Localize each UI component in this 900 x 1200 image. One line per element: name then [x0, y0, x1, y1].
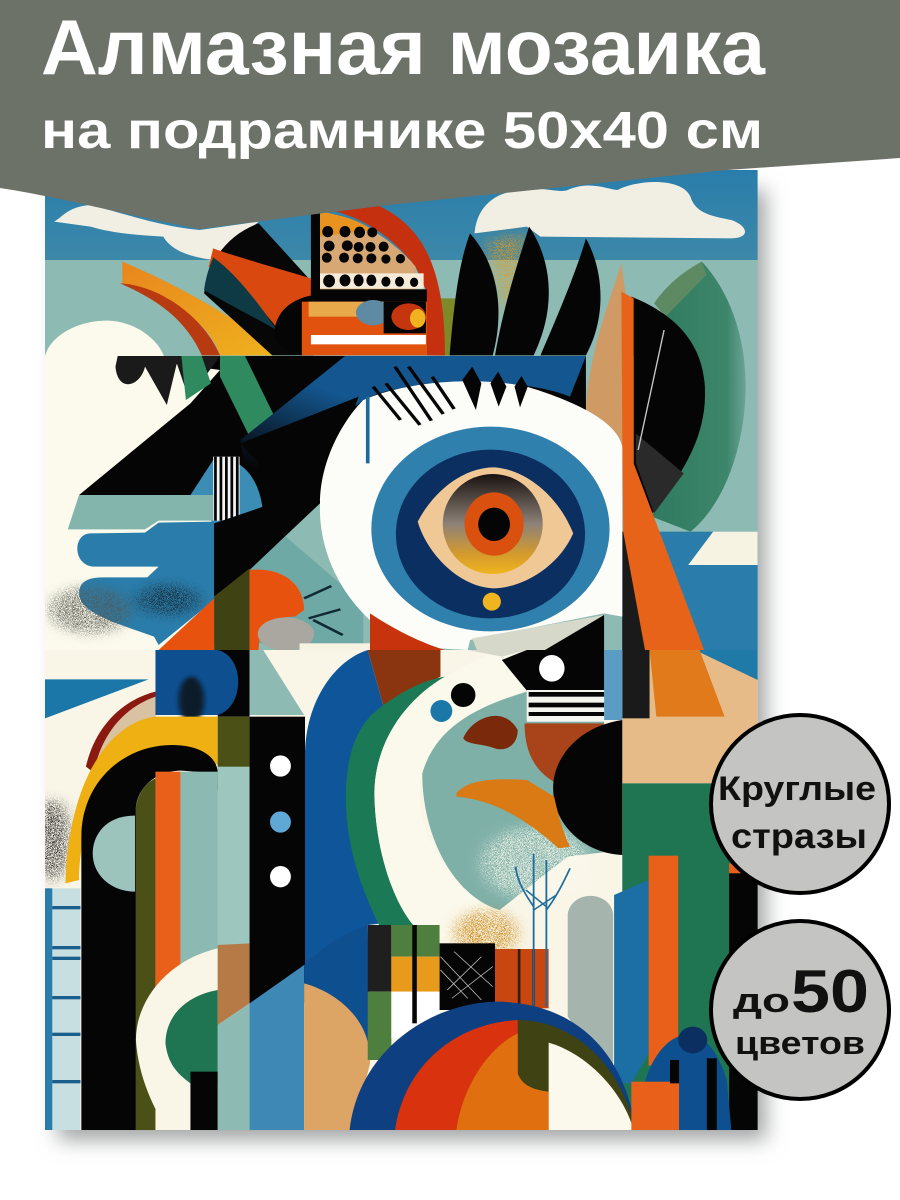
- big teal circle: [422, 692, 622, 910]
- orange beak: [456, 779, 570, 848]
- black arch: [81, 745, 218, 1130]
- orange wing: [120, 262, 284, 355]
- yellow arch: [65, 717, 218, 883]
- left ladder strip: [45, 888, 80, 1130]
- rust curve: [86, 692, 155, 770]
- navy speckle panel: [304, 925, 370, 1063]
- olive patch: [436, 298, 456, 355]
- title: Алмазная мозаика: [41, 3, 766, 91]
- badge: round rhinestones: [711, 715, 889, 893]
- rust block: [525, 723, 604, 783]
- white speckle over teal: [481, 827, 590, 900]
- orange block: [495, 949, 549, 1008]
- white crescent: [374, 650, 527, 943]
- cloud left: [54, 205, 259, 260]
- lower right blue field: [622, 532, 758, 650]
- amber speckle behind spikes: [486, 233, 527, 317]
- big bottom dome: [350, 1002, 636, 1130]
- teal nose bar: [68, 495, 213, 529]
- orange column: [649, 856, 678, 1066]
- rust blob: [463, 716, 518, 749]
- gray crescent and black: [472, 615, 604, 650]
- blue column: [614, 880, 649, 1083]
- stripes block: [368, 925, 440, 1060]
- artwork: abstract cubist painting, upper part: [45, 170, 758, 651]
- columns: [136, 717, 250, 1130]
- cloud right: [475, 182, 745, 238]
- bottom orange box: [631, 1082, 679, 1130]
- eye white: [320, 381, 622, 650]
- eye: rust below: [370, 613, 445, 650]
- radio / dotted machine: [275, 206, 445, 355]
- antenna: [515, 854, 570, 1007]
- black half circle: [553, 720, 622, 855]
- black column with dots: [250, 717, 305, 1003]
- teal half circle: [93, 816, 135, 892]
- green arc: [346, 677, 445, 925]
- black strip: [622, 532, 645, 650]
- black block with white ellipse: [468, 650, 604, 722]
- black spikes: [450, 227, 601, 355]
- orange spear: [621, 292, 704, 650]
- badge: round rhinestones: стразы: [731, 817, 867, 856]
- blue fingers: [50, 522, 214, 645]
- navy top square: [155, 650, 304, 723]
- badge: up to 50 colours: цветов: [735, 1025, 865, 1061]
- right blocks: [604, 650, 758, 1130]
- eyelashes: [368, 367, 454, 463]
- green crescent right: [631, 262, 746, 532]
- diamonds: [462, 367, 528, 410]
- dark dome: [204, 223, 313, 355]
- blue arch small: [645, 1027, 731, 1130]
- badge: up to 50 colours: [711, 921, 889, 1099]
- canvas drop shadow: [58, 190, 766, 1140]
- black square with white lines: [440, 943, 495, 1010]
- dots: [430, 683, 475, 722]
- blue ear with stripes: [190, 456, 262, 524]
- whiskers: [304, 586, 343, 635]
- badge: up to 50 colours: до: [733, 982, 790, 1020]
- gray column: [568, 896, 613, 1083]
- header banner: [0, 0, 900, 229]
- tan triangle: [586, 263, 634, 463]
- black head and teeth: [79, 356, 586, 597]
- badge: round rhinestones: Круглые: [718, 770, 876, 808]
- orange and olive blocks: [159, 568, 314, 651]
- rust wedge: [368, 650, 440, 707]
- artwork: abstract cubist painting, lower part: [34, 650, 758, 1130]
- black neck diagonal: [214, 397, 359, 597]
- badge: up to 50 colours: 50: [791, 958, 869, 1025]
- tan column: [304, 983, 370, 1130]
- subtitle: на подрамнике 50х40 см: [41, 102, 763, 160]
- white arc and green: [136, 943, 304, 1130]
- navy arch: [305, 650, 384, 967]
- amber speckle: [454, 910, 518, 957]
- teal area under chin: [214, 537, 363, 643]
- blue left triangle: [45, 679, 149, 718]
- left cream field: [45, 321, 227, 650]
- eye rings: [371, 427, 610, 631]
- dark speckle left: [34, 800, 70, 880]
